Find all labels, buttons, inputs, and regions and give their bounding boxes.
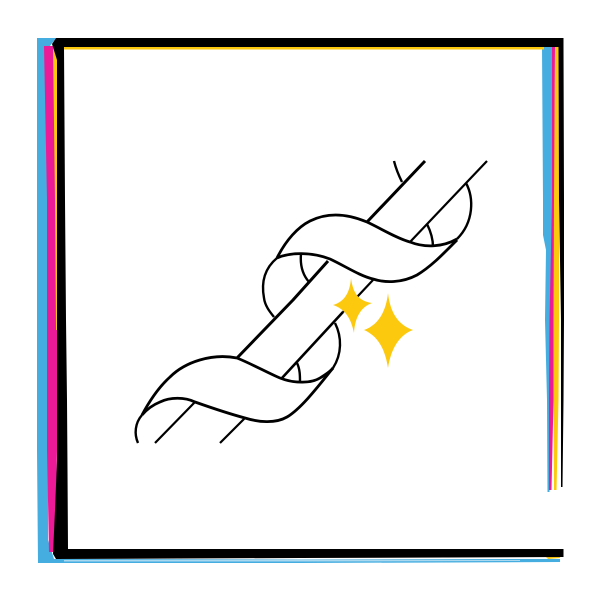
pole: right line (220, 161, 487, 443)
sparkles (333, 278, 413, 368)
frame: misregistered CMYK border (37, 38, 564, 563)
frame: cyan layer (37, 38, 560, 563)
sparkle: small star (333, 278, 372, 333)
frame: black layer (52, 38, 564, 559)
upper ribbon band (277, 215, 457, 282)
sparkle: large star (364, 293, 413, 368)
lower ribbon back curls (136, 323, 340, 443)
upper ribbon back curls (263, 161, 471, 317)
frame: yellow layer (53, 46, 560, 559)
pole: left line (155, 161, 425, 443)
lower ribbon band (142, 357, 333, 422)
frame: magenta layer (44, 46, 555, 552)
ribbon and pole line art (136, 161, 487, 443)
